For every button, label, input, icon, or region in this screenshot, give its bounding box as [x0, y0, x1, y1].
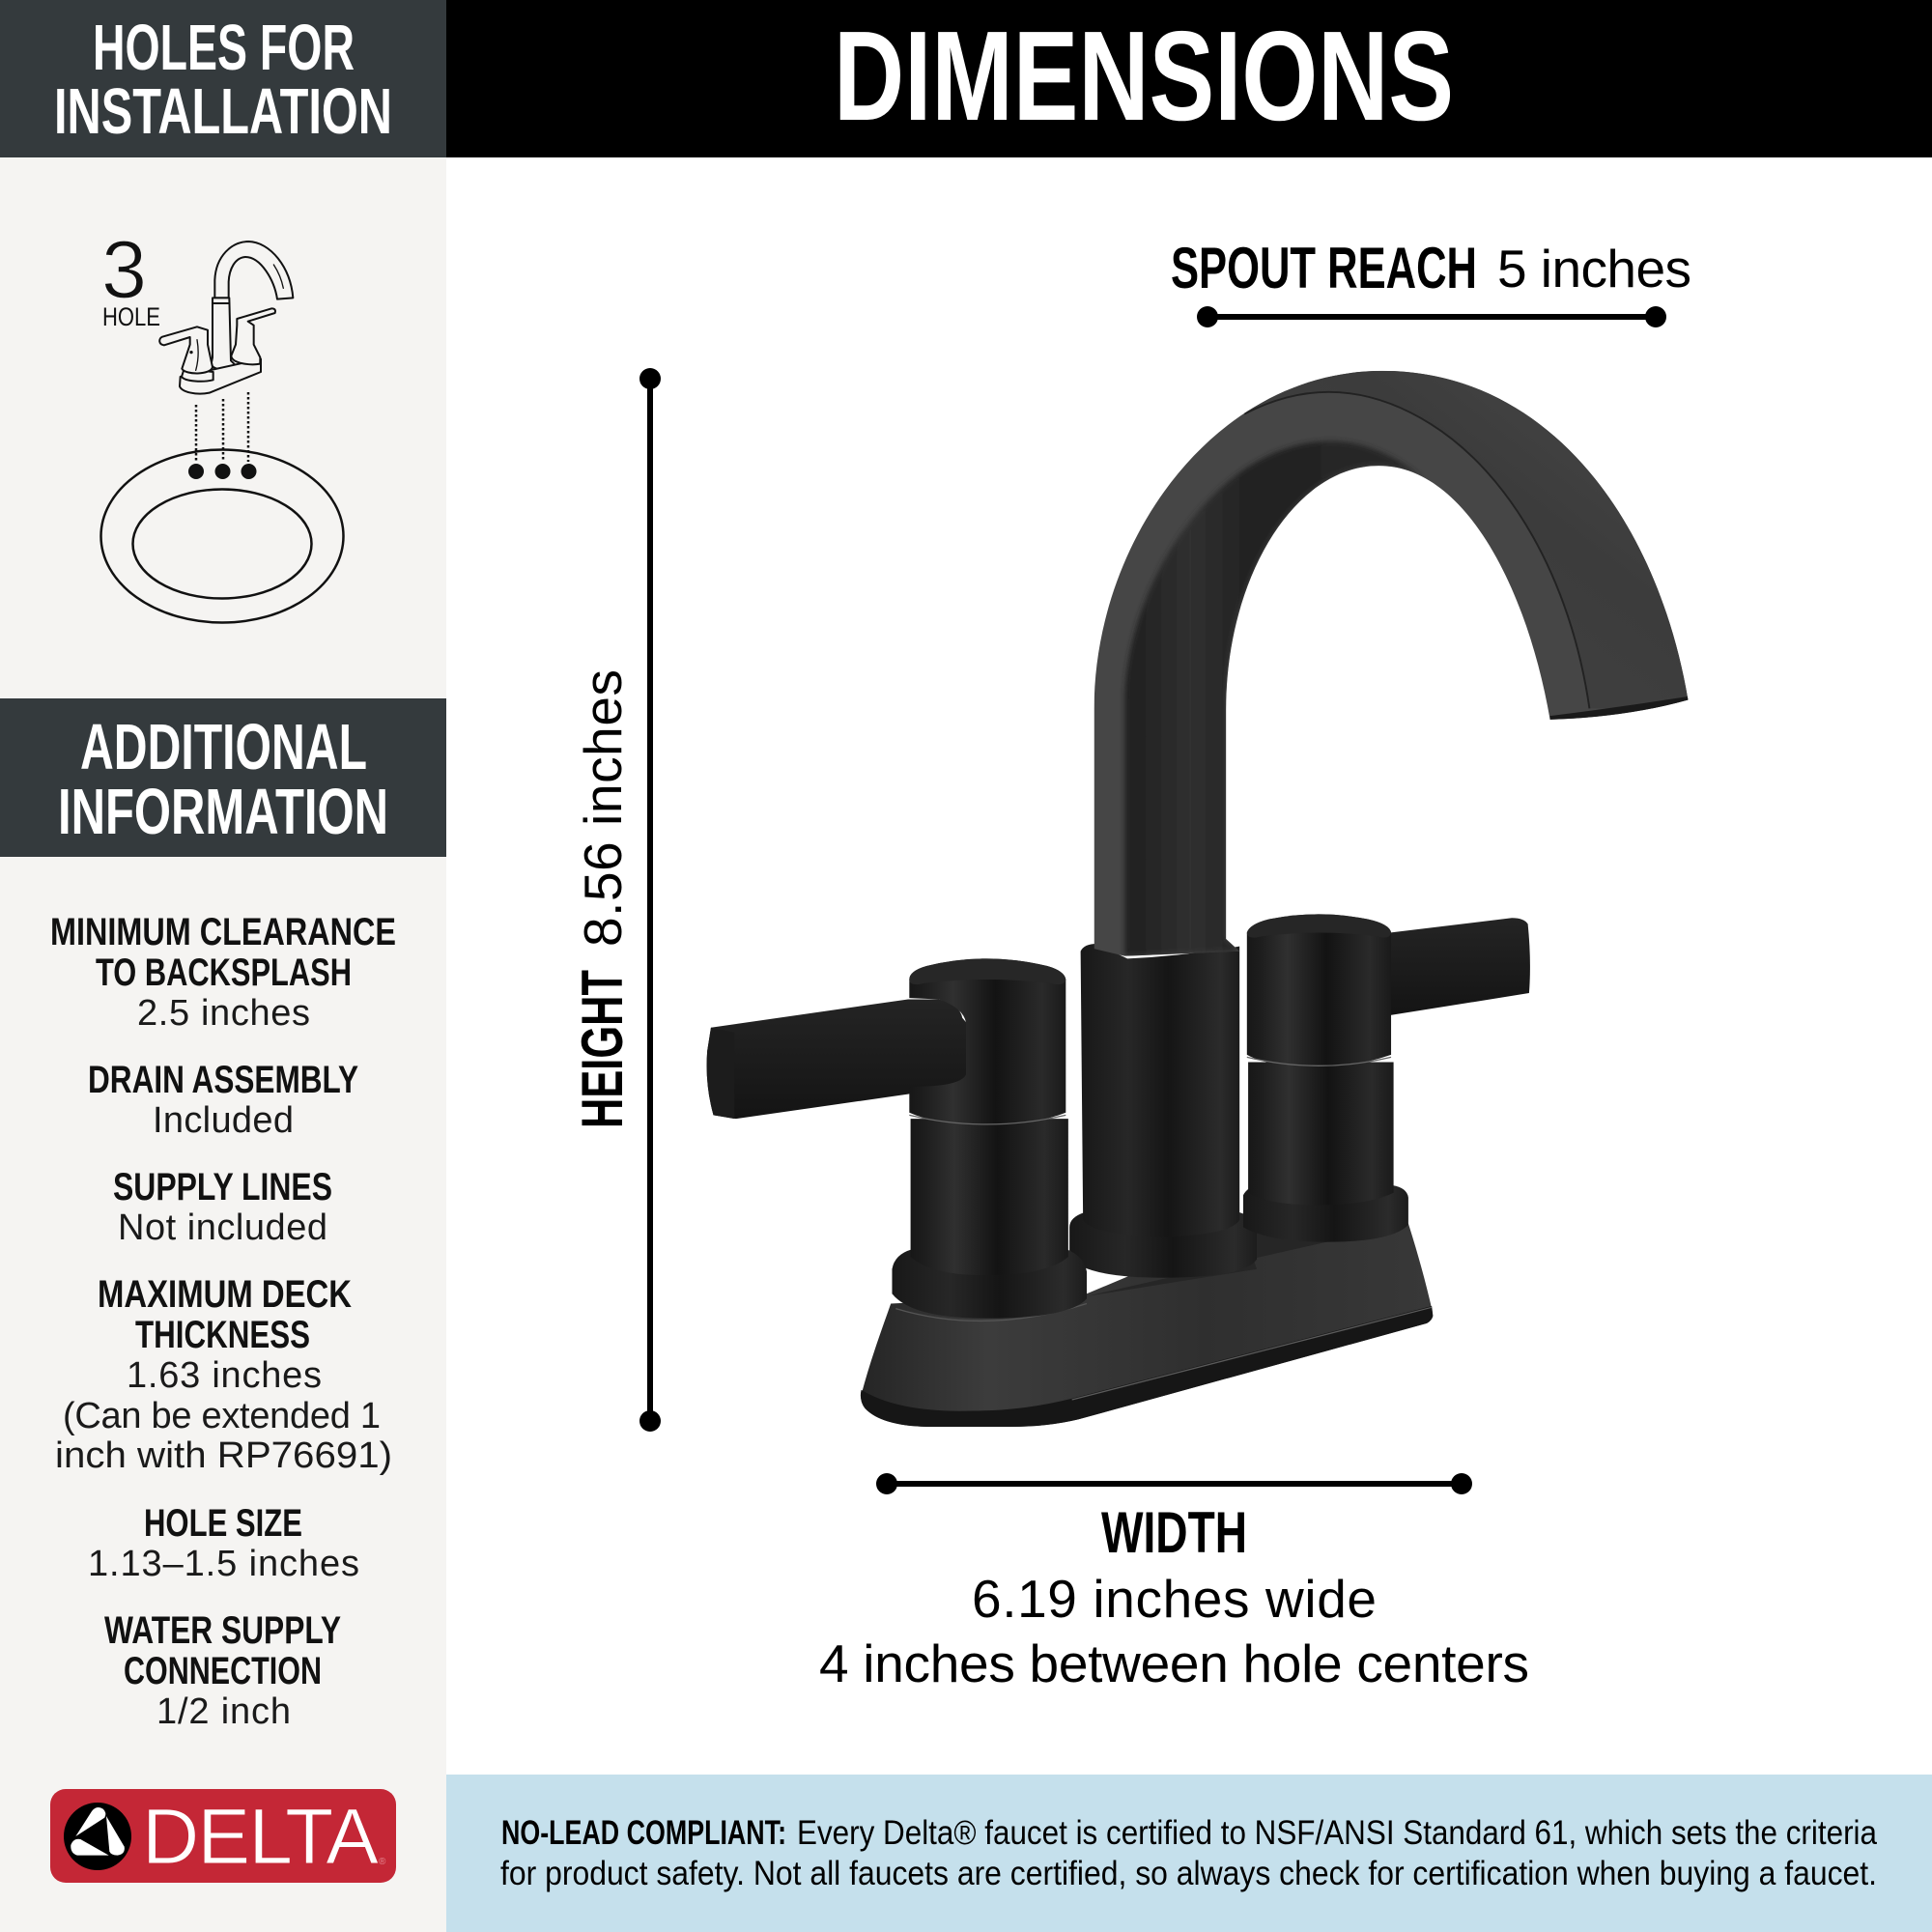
spout — [1084, 357, 1700, 967]
right handle — [1390, 918, 1530, 1015]
panel: dimensions title bar: DIMENSIONS — [834, 5, 1454, 147]
left knob — [909, 958, 1065, 1125]
callout: no-lead compliant — [446, 1775, 1932, 1932]
panel: holes for installation header: HOLES FOR — [93, 12, 355, 84]
icon: three hole label: HOLE — [102, 302, 160, 331]
text block: maximum deck thickness: MAXIMUM DECK — [98, 1273, 352, 1316]
panel: holes for installation header: INSTALLATION — [54, 75, 392, 148]
text block: drain assembly — [88, 1059, 358, 1141]
text block: hole size — [88, 1502, 359, 1584]
panel: holes for installation header — [0, 0, 446, 157]
text block: hole size: 1.13–1.5 inches — [88, 1544, 359, 1584]
text block: maximum deck thickness: (Can be extended 1 — [63, 1396, 381, 1436]
width label: 4 inches between hole centers — [819, 1634, 1529, 1693]
text block: maximum deck thickness: inch with RP76691) — [55, 1435, 392, 1476]
right knob — [1247, 914, 1391, 1067]
text block: supply lines: Not included — [118, 1208, 327, 1248]
left handle — [707, 999, 969, 1119]
text block: maximum deck thickness: THICKNESS — [135, 1314, 310, 1356]
text block: water supply connection: WATER SUPPLY — [104, 1609, 341, 1652]
right collar — [1243, 1185, 1408, 1242]
height label — [570, 669, 635, 1128]
text block: minimum clearance — [50, 911, 396, 1034]
text block: drain assembly: DRAIN ASSEMBLY — [88, 1059, 358, 1101]
logo: delta: ® — [379, 1857, 386, 1867]
panel: dimensions title bar — [446, 0, 1932, 157]
right lower cylinder — [1248, 1062, 1394, 1205]
text block: water supply connection — [104, 1609, 341, 1732]
width dimension line — [876, 1473, 1472, 1494]
icon: faucet line drawing — [159, 242, 293, 394]
text block: water supply connection: CONNECTION — [124, 1650, 322, 1692]
text block: minimum clearance: MINIMUM CLEARANCE — [50, 911, 396, 953]
height label: HEIGHT — [570, 970, 635, 1128]
text block: drain assembly: Included — [153, 1100, 294, 1141]
icon: sink basin with three holes — [100, 392, 344, 622]
arrow: spout reach dimension line — [1197, 306, 1666, 327]
text block: maximum deck thickness: 1.63 inches — [127, 1355, 322, 1396]
center collar — [1069, 1212, 1257, 1278]
left lower cylinder — [911, 1119, 1068, 1275]
text block: water supply connection: 1/2 inch — [156, 1691, 291, 1732]
center column — [1081, 944, 1239, 1237]
icon: three hole label: 3 — [101, 224, 147, 315]
arrow: height dimension line — [639, 368, 661, 1432]
spout reach label: 5 inches — [1497, 239, 1691, 298]
left collar — [892, 1249, 1087, 1319]
panel: sidebar background — [0, 0, 446, 1932]
panel: additional information header — [0, 698, 446, 857]
icon: three hole label — [101, 224, 160, 331]
text block: minimum clearance: 2.5 inches — [137, 993, 310, 1034]
width label — [819, 1500, 1529, 1693]
faucet photo — [707, 357, 1700, 1427]
width label: 6.19 inches wide — [972, 1569, 1377, 1629]
logo: delta — [50, 1789, 396, 1883]
text block: supply lines: SUPPLY LINES — [113, 1166, 332, 1208]
text block: minimum clearance: TO BACKSPLASH — [96, 952, 352, 994]
text block: maximum deck thickness — [55, 1273, 392, 1476]
height label: 8.56 inches — [573, 669, 633, 947]
panel: additional information header: INFORMATION — [58, 776, 388, 848]
panel: additional information header: ADDITIONAL — [80, 711, 367, 783]
width label: WIDTH — [1101, 1500, 1247, 1565]
faucet base — [861, 1224, 1433, 1427]
logo: delta: DELTA — [142, 1793, 379, 1881]
text block: hole size: HOLE SIZE — [144, 1502, 302, 1545]
callout: no-lead compliant: NO-LEAD COMPLIANT: — [501, 1814, 786, 1852]
spout reach label: SPOUT REACH — [1171, 236, 1477, 300]
text block: supply lines — [113, 1166, 332, 1248]
